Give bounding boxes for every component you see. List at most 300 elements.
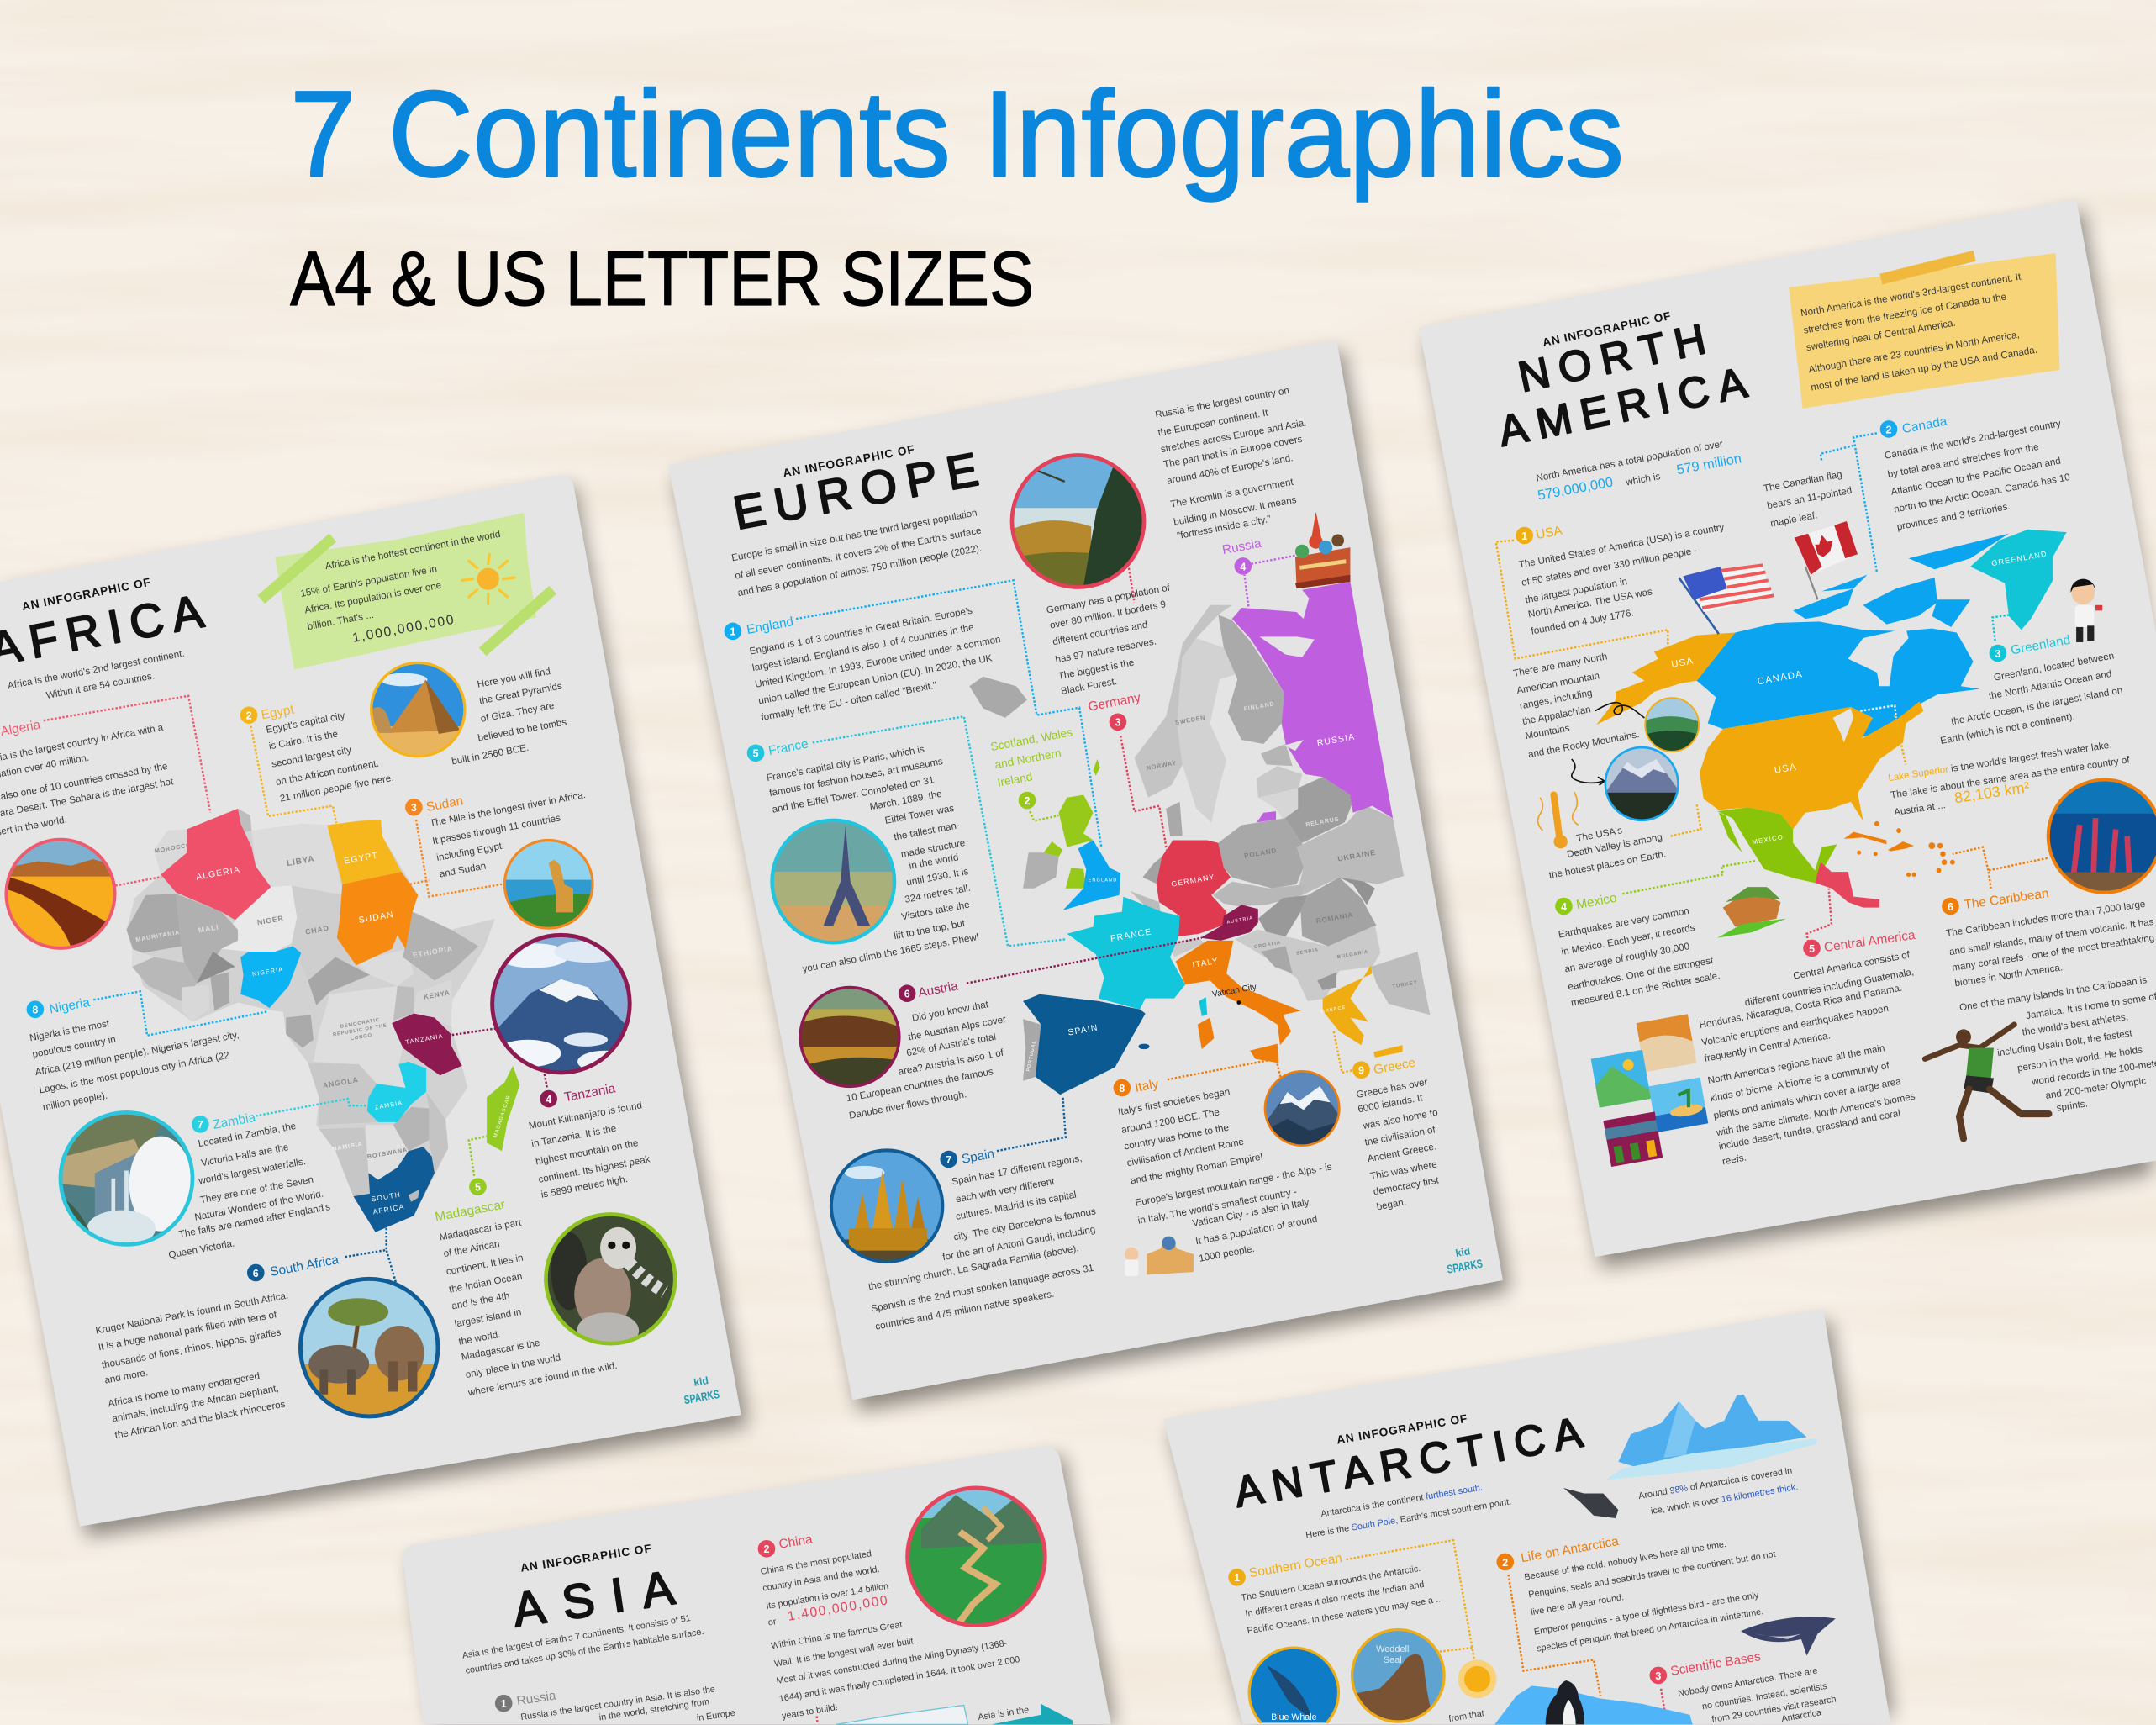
Italy section: Italy's first societies began <box>1117 1086 1231 1118</box>
Germany section: different countries and <box>1052 619 1148 647</box>
Mexico section: an average of roughly 30,000 <box>1563 941 1690 974</box>
text: pyramids: of Giza. They are <box>480 700 555 725</box>
Life on Antarctica section: Emperor penguins - a type of flightless bird - are the only <box>1533 1590 1760 1638</box>
map: Tanzania <box>392 1014 462 1075</box>
Mexico section: Earthquakes are very common <box>1558 905 1690 941</box>
Zambia section: Queen Victoria. <box>167 1237 235 1261</box>
Egypt section: on the African continent. <box>275 758 380 788</box>
icon: thermometer <box>1538 792 1579 848</box>
Zambia section: The falls are named after England's <box>178 1201 331 1240</box>
logo: kid sparks: SPARKS <box>683 1387 720 1406</box>
Egypt section: second largest city <box>271 744 352 770</box>
Greece section: Greece has over <box>1356 1077 1429 1100</box>
Austria section: Did you know that <box>911 999 990 1024</box>
map labels: grey countries: BOTSWANA <box>366 1146 409 1160</box>
map: USA: USA <box>1774 762 1798 776</box>
Spain section: Spanish is the 2nd most spoken language across 31 <box>870 1263 1094 1315</box>
text and map: Asia in the world: Asia is in the <box>978 1705 1030 1722</box>
Scotland, Wales, Northern Ireland label: Ireland <box>996 770 1033 789</box>
heading: Antarctica: ANTARCTICA <box>1231 1408 1586 1517</box>
Italy section: around 1200 BCE. The <box>1120 1106 1220 1136</box>
map labels: grey countries: MALI <box>198 922 219 935</box>
map: USA <box>1700 701 1924 829</box>
title: 7 Continents Infographics <box>290 65 1624 202</box>
text: mountain ranges: There are many North <box>1512 651 1608 679</box>
Russia section: The part that is in Europe covers <box>1162 434 1304 470</box>
China section: 1644) and it was finally completed in 1644. It took over 2,000 <box>778 1654 1020 1704</box>
Madagascar section: 5 <box>475 1182 481 1194</box>
Zambia section: They are one of the Seven <box>199 1174 314 1205</box>
connector lines <box>44 696 547 1283</box>
China section: country in Asia and the world. <box>762 1564 880 1594</box>
Germany section <box>1046 582 1172 731</box>
map: Central America <box>1815 862 1879 908</box>
callout: green note: billion. That's ... <box>307 609 375 632</box>
Tanzania section: highest mountain on the <box>535 1137 639 1168</box>
England section: formally left the EU - often called "Brexit." <box>760 680 937 723</box>
icon: US flag <box>1679 564 1774 634</box>
icon: whale <box>1741 1617 1836 1656</box>
Madagascar section: only place in the world <box>465 1352 561 1380</box>
text: mountain ranges <box>1512 651 1640 760</box>
Central America section: North America's regions have all the main <box>1707 1042 1885 1086</box>
map: Alaska: USA <box>1670 657 1695 670</box>
France section: 324 metres tall. <box>904 883 972 905</box>
map: Greece <box>1320 965 1403 1058</box>
map: Alaska <box>1596 632 1735 725</box>
map labels: grey countries <box>1146 699 1418 990</box>
heading: North America <box>1494 309 1751 456</box>
Germany section: Germany has a population of <box>1046 582 1172 616</box>
Madagascar section: Madagascar <box>434 1197 506 1225</box>
Italy section <box>1114 1077 1333 1264</box>
Central America section <box>1699 928 1916 1168</box>
photo: Sahara desert <box>6 840 115 948</box>
Italy section: 8 <box>1119 1083 1125 1095</box>
icon: earthquake house <box>1717 887 1786 938</box>
Egypt section: Egypt's capital city <box>266 710 346 736</box>
Zambia section: Victoria Falls are the <box>200 1142 289 1168</box>
Caribbean section: sprints. <box>2056 1098 2089 1114</box>
Zambia section: Located in Zambia, the <box>198 1121 297 1149</box>
China section: 1,400,000,000 <box>787 1593 890 1624</box>
Austria section: the Austrian Alps cover <box>907 1014 1007 1042</box>
map: Ireland <box>1023 852 1059 889</box>
South Africa section: thousands of lions, rhinos, hippos, giraffes <box>101 1327 282 1371</box>
photo: Weddell seal: Seal <box>1384 1655 1402 1665</box>
map: France: FRANCE <box>1110 927 1152 944</box>
text: mountain ranges: American mountain <box>1516 670 1600 696</box>
Central America section: 5 <box>1809 943 1815 955</box>
intro text: Asia is the largest of Earth's 7 continents. It consists of 51 <box>461 1613 692 1661</box>
heading: Antarctica: AN INFOGRAPHIC OF <box>1336 1412 1468 1447</box>
label: Vatican City: Vatican City <box>1211 983 1258 1000</box>
Russia section: the European continent. It <box>1157 407 1269 439</box>
Central America section: Volcanic eruptions and earthquakes happen <box>1700 1003 1890 1048</box>
Madagascar section <box>434 1178 618 1399</box>
map: England: ENGLAND <box>1089 878 1117 884</box>
Scotland, Wales, Northern Ireland label: 2 <box>1025 795 1031 807</box>
photo: blue whale <box>1249 1648 1338 1722</box>
Russia section: Russia <box>1221 536 1262 557</box>
Algeria section: Algeria <box>0 718 42 739</box>
Greenland section <box>1939 633 2123 746</box>
icon: child in Greenland <box>2070 579 2102 642</box>
map: Canada: CANADA <box>1757 669 1804 687</box>
Canada section: north to the Arctic Ocean. Canada has 10 <box>1893 472 2071 515</box>
Greenland section: Greenland <box>2010 633 2071 658</box>
Scotland, Wales, Northern Ireland label: and Northern <box>994 746 1062 771</box>
England section: 1 <box>730 626 735 638</box>
intro text: countries and takes up 30% of the Earth's habitable surface. <box>465 1627 704 1676</box>
Caribbean section: 6 <box>1948 901 1953 913</box>
Germany section: over 80 million. It borders 9 <box>1049 599 1167 631</box>
heading: Europe: EUROPE <box>730 443 983 540</box>
France section: 5 <box>753 748 759 760</box>
Greenland section: the Arctic Ocean, is the largest island on <box>1950 685 2123 727</box>
map: Egypt <box>327 820 402 884</box>
Mexico section <box>1555 891 1721 1009</box>
intro text: Europe is small in size but has the third largest population <box>730 507 978 563</box>
map labels: grey countries: REPUBLIC OF THE <box>333 1023 387 1038</box>
Scotland, Wales, Northern Ireland label: Scotland, Wales <box>989 725 1073 753</box>
icon: iceberg <box>1606 1395 1816 1480</box>
Russia section: "fortress inside a city." <box>1176 514 1272 541</box>
photo: Black Forest <box>1012 455 1144 588</box>
map: Algeria <box>161 809 271 920</box>
Caribbean section: and small islands, many of them volcanic. It has <box>1948 916 2154 957</box>
map: Algeria: ALGERIA <box>195 866 241 883</box>
map labels: grey countries: KENYA <box>423 989 451 1001</box>
text: Death Valley: Death Valley is among <box>1566 831 1663 860</box>
USA section: USA <box>1535 524 1564 542</box>
map: Europe <box>969 582 1430 1095</box>
Mexico section: measured 8.1 on the Richter scale. <box>1570 970 1721 1009</box>
France section: and the Eiffel Tower. Completed on 31 <box>772 774 935 815</box>
Zambia section: Zambia <box>212 1110 257 1132</box>
fact: ice thickness: Around 98% of Antarctica is covered in <box>1637 1466 1793 1501</box>
map: Mexico <box>1717 807 1837 883</box>
Sudan section: Sudan <box>425 794 464 815</box>
Central America section: reefs. <box>1721 1152 1747 1168</box>
intro text: Here is the South Pole, Earth's most southern point. <box>1305 1496 1512 1541</box>
Italy section: Vatican City - is also in Italy. <box>1191 1196 1312 1229</box>
South Africa section <box>95 1253 340 1441</box>
Life on Antarctica section: Because of the cold, nobody lives here all the time. <box>1524 1539 1727 1583</box>
South Africa section: animals, including the African elephant, <box>111 1383 280 1424</box>
population stats <box>1535 439 1742 504</box>
text: pyramids <box>451 666 567 767</box>
text: Canadian flag: The Canadian flag <box>1763 469 1843 494</box>
Russia section: around 40% of Europe's land. <box>1166 452 1294 487</box>
map labels: grey countries: CONGO <box>351 1033 373 1042</box>
England section: largest island. England is also 1 of 4 countries in the <box>751 622 975 673</box>
China section: or <box>767 1617 778 1628</box>
photo: elephants <box>300 1279 438 1419</box>
Scientific Bases section: from 29 countries visit research <box>1711 1695 1837 1725</box>
photo: lemur <box>546 1214 675 1348</box>
Life on Antarctica section: 2 <box>1502 1557 1508 1569</box>
USA section: the largest population in <box>1524 576 1628 605</box>
map: Austria <box>1200 905 1258 941</box>
callout: yellow note: North America is the world's 3rd-largest continent. It <box>1800 271 2022 319</box>
callout: yellow note: Although there are 23 countries in North America, <box>1808 329 2021 375</box>
callout: green note: 1,000,000,000 <box>351 613 456 646</box>
Madagascar section: Madagascar is the <box>461 1337 540 1363</box>
subtitle: A4 & US LETTER SIZES <box>290 236 1034 322</box>
heading: North America: NORTH <box>1514 314 1710 401</box>
map: Tanzania: TANZANIA <box>405 1031 444 1046</box>
map labels: grey countries: ANGOLA <box>322 1075 359 1089</box>
South Africa section: the African lion and the black rhinoceros. <box>114 1398 289 1441</box>
USA section: 1 <box>1521 530 1527 542</box>
text: mountain ranges: the Appalachian <box>1521 704 1592 727</box>
map labels: grey countries: ETHIOPIA <box>412 944 453 959</box>
Nigeria section: Nigeria is the most <box>29 1018 111 1043</box>
map: South Africa <box>353 1147 435 1232</box>
Sudan section: The Nile is the longest river in Africa. <box>429 789 587 829</box>
callout: yellow note: most of the land is taken up by the USA and Canada. <box>1810 345 2038 393</box>
map labels: grey countries: MAURITANIA <box>135 928 181 943</box>
map: Zambia: ZAMBIA <box>374 1099 403 1111</box>
Spain section <box>867 1147 1097 1332</box>
text: Canadian flag: maple leaf. <box>1769 509 1818 529</box>
callout: yellow note <box>1789 253 2059 409</box>
Tanzania section: 4 <box>546 1094 551 1105</box>
Canada section <box>1880 414 2071 532</box>
map labels: grey countries: ROMANIA <box>1315 911 1354 925</box>
icon: Canadian flag <box>1795 521 1858 599</box>
photo: Alps <box>1265 1071 1339 1146</box>
map: Mexico: MEXICO <box>1752 833 1784 846</box>
photo: Austrian river <box>800 988 899 1086</box>
Spain section: for the art of Antoni Gaudi, including <box>941 1224 1096 1263</box>
map: England <box>1063 840 1120 910</box>
Russia section <box>1154 385 1307 575</box>
panel: Africa sheet <box>0 476 748 1538</box>
heading: Africa: AN INFOGRAPHIC OF <box>21 576 151 613</box>
Spain section: Spain has 17 different regions, <box>951 1153 1083 1188</box>
Russia section: stretches across Europe and Asia. <box>1160 417 1307 455</box>
France section: until 1930. It is <box>905 866 970 888</box>
Life on Antarctica section: species of penguin that breed on Antarctica in wintertime. <box>1536 1606 1764 1654</box>
Russia section: Russia <box>516 1689 557 1708</box>
map: Spain: SPAIN <box>1067 1023 1099 1038</box>
map labels: grey countries: SWEDEN <box>1174 714 1206 726</box>
Italy section: country was home to the <box>1123 1122 1230 1153</box>
map: South Africa: AFRICA <box>372 1202 405 1216</box>
intro text <box>730 507 983 599</box>
photo: Weddell seal: Weddell <box>1376 1644 1409 1654</box>
icon: St Basil's Cathedral <box>1295 512 1350 588</box>
Austria section: Austria <box>917 979 960 1000</box>
map: Italy <box>1176 941 1301 1063</box>
Caribbean section: many coral reefs - one of the most breathtaking <box>1951 932 2155 973</box>
fact: ice thickness <box>1637 1466 1799 1517</box>
Zambia section: 7 <box>198 1119 203 1131</box>
icon: sprinter Usain Bolt <box>1925 1025 2048 1138</box>
map: Nigeria: NIGERIA <box>251 965 284 978</box>
France section: lift to the top, but <box>893 918 967 942</box>
map labels: grey countries: MOROCCO <box>154 841 192 855</box>
map: Russia <box>1232 582 1393 818</box>
callout: green note: Africa. Its population is over one <box>303 580 442 616</box>
Greece section: Greece <box>1373 1056 1416 1078</box>
callout: green note: 15% of Earth's population live in <box>299 563 438 599</box>
Spain section: the stunning church, La Sagrada Familia (above). <box>867 1242 1079 1292</box>
China section: China <box>778 1532 814 1552</box>
China section: 2 <box>764 1543 770 1555</box>
Caribbean section: biomes in North America. <box>1954 962 2064 989</box>
icon: seal swimming <box>1563 1488 1618 1518</box>
map: France <box>1067 897 1207 1016</box>
map labels: grey countries: BULGARIA <box>1336 950 1369 960</box>
Mexico section: 4 <box>1561 901 1567 913</box>
map: Canada <box>1697 534 2009 737</box>
Scientific Bases section: Scientific Bases <box>1669 1649 1762 1679</box>
map labels: grey countries: FINLAND <box>1243 699 1275 713</box>
Southern Ocean section: In different areas it also meets the Indian and <box>1245 1580 1425 1619</box>
Central America section: Central America consists of <box>1792 949 1911 982</box>
map: Africa <box>126 809 519 1232</box>
France section: you can also climb the 1665 steps. Phew! <box>802 931 980 974</box>
map: Spain: PORTUGAL <box>1026 1040 1037 1072</box>
South Africa section: South Africa <box>269 1253 340 1279</box>
Scotland, Wales, Northern Ireland label <box>989 725 1073 809</box>
China section: Within China is the famous Great <box>770 1620 903 1651</box>
logo: kid sparks <box>683 1374 720 1406</box>
photo: Sagrada Familia <box>831 1150 942 1262</box>
Egypt section: 2 <box>246 710 252 722</box>
Madagascar section: Madagascar is part <box>439 1217 523 1242</box>
intro text: and has a population of almost 750 million people (2022). <box>737 543 983 599</box>
Nigeria section: 8 <box>32 1005 38 1016</box>
Central America section: plants and animals which cover a large area <box>1713 1076 1902 1121</box>
Nigeria section: populous country in <box>31 1034 117 1060</box>
icons: biomes <box>1591 1014 1708 1167</box>
text fragment: from that <box>1448 1708 1485 1724</box>
Greenland section: Earth (which is not a continent). <box>1939 711 2076 746</box>
heading: North America: AN INFOGRAPHIC OF <box>1542 309 1672 349</box>
France section: Eiffel Tower was <box>884 803 955 826</box>
Nigeria section: Lagos, is the most populous city in Africa (22 <box>39 1050 230 1095</box>
USA section: of 50 states and over 330 million people - <box>1521 545 1698 588</box>
map: Antarctica with penguins <box>1494 1680 1693 1724</box>
map: Austria: AUSTRIA <box>1226 915 1254 926</box>
France section: France <box>767 737 809 758</box>
Greenland section: the North Atlantic Ocean and <box>1988 668 2112 702</box>
Tanzania section: Tanzania <box>563 1081 617 1105</box>
photo: Eiffel Tower <box>772 820 894 945</box>
Greece section: 6000 islands. It <box>1357 1092 1424 1115</box>
England section <box>725 605 1002 723</box>
Austria section: Danube river flows through. <box>848 1089 967 1121</box>
USA section: The United States of America (USA) is a country <box>1518 521 1726 571</box>
Canada section: Canada is the world's 2nd-largest country <box>1884 418 2062 462</box>
Austria section: 62% of Austria's total <box>905 1031 997 1058</box>
Austria section: 6 <box>904 989 910 1000</box>
connector lines <box>1346 1540 1667 1722</box>
map labels: grey countries: NORWAY <box>1146 759 1178 772</box>
Italy section: and the mighty Roman Empire! <box>1130 1151 1264 1186</box>
icon: sun <box>1458 1659 1496 1698</box>
Scientific Bases section: 3 <box>1655 1670 1661 1682</box>
photo: Weddell seal <box>1352 1629 1444 1722</box>
Egypt section <box>240 702 394 804</box>
panel: Antarctica sheet <box>1163 1309 1894 1725</box>
photo: blue whale: Blue Whale <box>1271 1712 1317 1722</box>
Italy section: 1000 people. <box>1198 1243 1256 1264</box>
England section: union called the European Union (EU). In 2020, the UK <box>757 652 994 707</box>
intro text: Antarctica is the continent furthest south. <box>1320 1483 1484 1519</box>
Mexico section: in Mexico. Each year, it records <box>1560 922 1696 957</box>
Life on Antarctica section <box>1496 1534 1776 1654</box>
Egypt section: Egypt <box>260 702 296 722</box>
map: Madagascar <box>487 1066 519 1151</box>
Germany section: 3 <box>1115 717 1120 729</box>
South Africa section: Africa is home to many endangered <box>107 1370 261 1409</box>
heading: Asia: AN INFOGRAPHIC OF <box>519 1542 652 1575</box>
South Africa section: It is a huge national park filled with tens of <box>98 1309 278 1353</box>
Austria section <box>846 979 1007 1121</box>
map: Sudan: SUDAN <box>358 910 395 926</box>
France section: France's capital city is Paris, which is <box>766 744 925 783</box>
connector: China to map <box>816 1717 819 1723</box>
Egypt section: is Cairo. It is the <box>268 729 339 752</box>
map: Italy: ITALY <box>1192 957 1220 970</box>
text: Canadian flag: bears an 11-pointed <box>1766 485 1853 511</box>
Lake Superior fact: Lake Superior is the world's largest fresh water lake. <box>1888 740 2112 783</box>
logo: kid sparks: SPARKS <box>1446 1257 1484 1276</box>
Tanzania section: is 5899 metres high. <box>540 1174 629 1200</box>
intro text: Africa is the world's 2nd largest continent. <box>7 648 186 692</box>
map: South Africa: SOUTH <box>371 1190 401 1204</box>
text: Death Valley <box>1548 825 1667 881</box>
Spain section: countries and 475 million native speakers. <box>874 1289 1055 1332</box>
Russia section: Russia is the largest country in Asia. It is also the <box>520 1684 716 1722</box>
callout: yellow note: stretches from the freezing ice of Canada to the <box>1803 291 2007 336</box>
Zambia section: Natural Wonders of the World. <box>193 1189 324 1223</box>
Mexico section: earthquakes. One of the strongest <box>1567 955 1715 993</box>
callout: green note: Africa is the hottest continent in the world <box>324 529 501 572</box>
callout: green note <box>261 513 553 670</box>
text: Death Valley: the hottest places on Earth. <box>1548 848 1667 881</box>
France section <box>747 737 980 974</box>
Greece section: Ancient Greece. <box>1367 1141 1437 1164</box>
map labels: grey countries: LIBYA <box>286 855 315 868</box>
Greenland section: 3 <box>1995 648 2000 660</box>
France section: made structure <box>900 837 966 860</box>
map labels: grey countries: CROATIA <box>1254 941 1281 950</box>
intro text: Within it are 54 countries. <box>45 670 156 701</box>
USA section: founded on 4 July 1776. <box>1531 607 1635 637</box>
panel: North America sheet <box>1419 199 2156 1268</box>
Central America section: Central America <box>1823 928 1916 955</box>
connector lines <box>1496 433 2048 942</box>
Caribbean section: person in the world. He holds <box>2016 1044 2143 1074</box>
map: Germany <box>1157 840 1231 936</box>
China section: Most of it was constructed during the Ming Dynasty (1368- <box>776 1638 1008 1686</box>
Life on Antarctica section: Life on Antarctica <box>1520 1534 1621 1565</box>
Russia section: in the world, stretching from <box>598 1696 710 1722</box>
map: North America <box>1596 530 2067 908</box>
map labels: grey countries: POLAND <box>1243 847 1278 860</box>
Southern Ocean section: Southern Ocean <box>1248 1551 1343 1580</box>
Spain section: 7 <box>946 1154 951 1166</box>
Spain section: Spain <box>961 1147 995 1167</box>
Italy section: It has a population of around <box>1194 1214 1318 1247</box>
Greece section: This was where <box>1369 1159 1438 1182</box>
